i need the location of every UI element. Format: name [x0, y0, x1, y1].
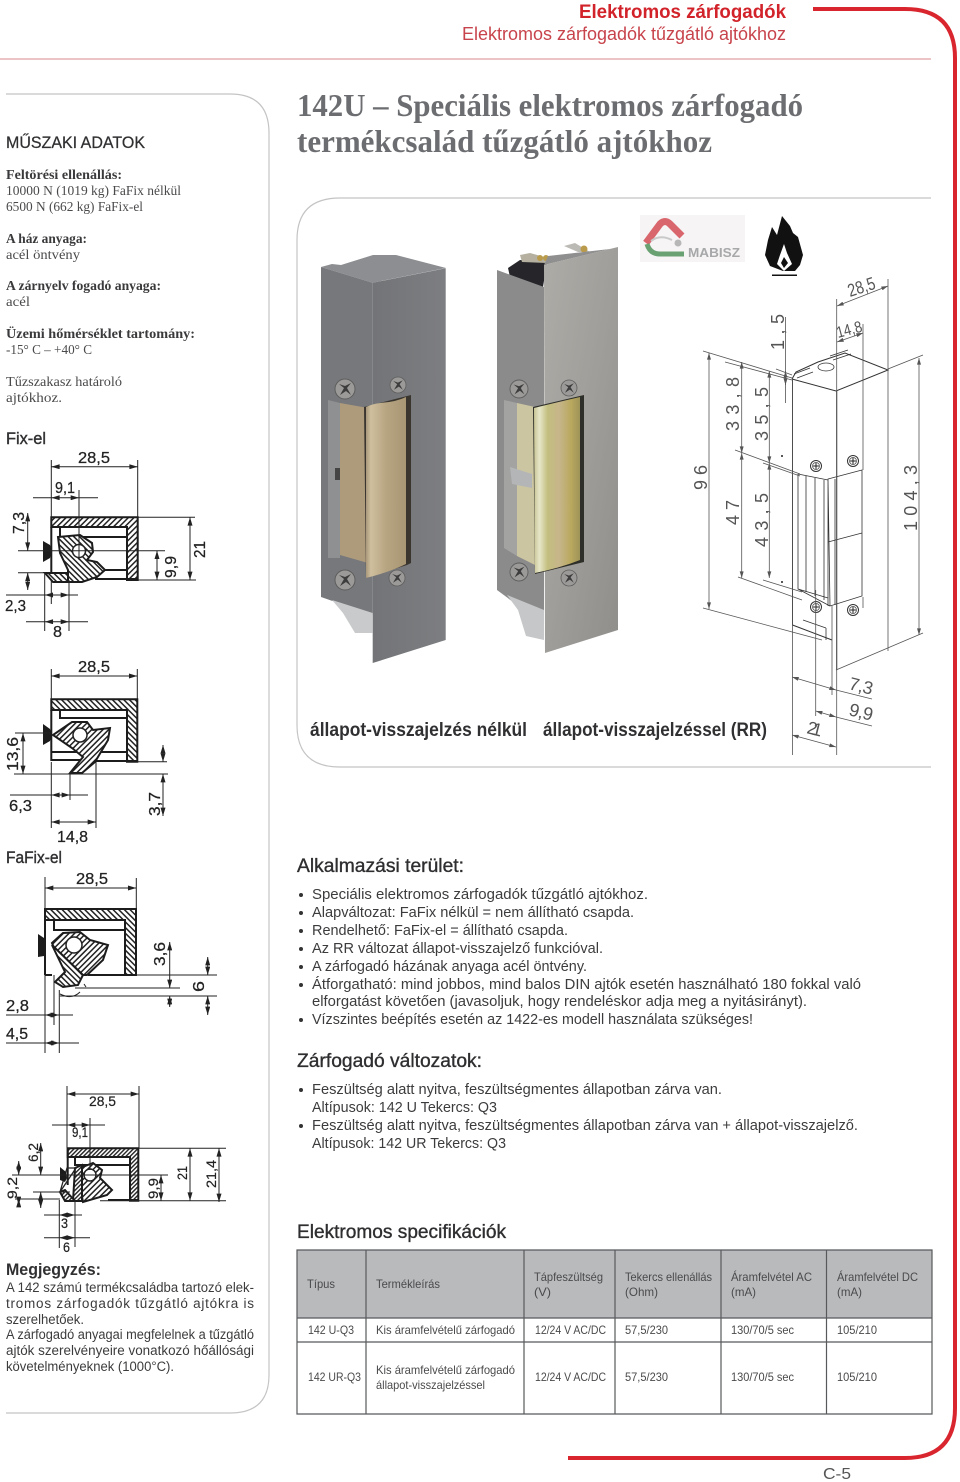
- table: electrical specifications: Áramfelvétel DC: [837, 1269, 918, 1284]
- section: application area: [297, 856, 861, 1028]
- logo: MABISZ: MABISZ: [688, 245, 740, 260]
- note text: tromos zárfogadók tűzgátló ajtókra is: [6, 1296, 254, 1311]
- table: electrical specifications: (mA): [837, 1285, 862, 1299]
- red page frame: [568, 9, 955, 1458]
- table: electrical specifications: Tápfeszültség: [534, 1270, 603, 1284]
- technical drawing: isometric strike with dimensions: 104,3: [901, 465, 921, 531]
- table: electrical specifications: 105/210: [837, 1323, 877, 1337]
- table: electrical specifications: 142 UR-Q3: [308, 1370, 361, 1384]
- note text: szerelhetőek.: [6, 1312, 84, 1327]
- table: electrical specifications: 130/70/5 sec: [731, 1370, 794, 1384]
- drawing: Fix-el open section: 6,3: [9, 798, 32, 815]
- technical drawing: isometric strike with dimensions: 1,5: [768, 314, 788, 350]
- table: electrical specifications: (mA): [731, 1285, 756, 1299]
- drawing: FaFix-el section: [6, 871, 217, 1053]
- header: Elektromos zárfogadók: [579, 2, 786, 23]
- table: electrical specifications: (Ohm): [625, 1285, 658, 1299]
- technical drawing: isometric strike with dimensions: 96: [691, 465, 711, 490]
- captions under product photos: állapot-visszajelzés nélkül: [310, 720, 527, 741]
- panel: technical data: [6, 133, 195, 405]
- drawing: Fix-el closed section: 8: [53, 624, 62, 641]
- bullet list: strike variants: Feszültség alatt nyitva, feszültségmentes állapotban zárva van + állapot-visszajelző.: [312, 1117, 858, 1134]
- technical drawing: isometric strike with dimensions: 14,8: [835, 319, 864, 342]
- drawing: FaFix-el section: 6: [191, 981, 208, 992]
- drawing: lower section with dimensions: 6: [63, 1239, 70, 1255]
- table: electrical specifications: 130/70/5 sec: [731, 1323, 794, 1337]
- text block: specs: Tűzszakasz határoló: [6, 374, 122, 389]
- note text: ajtók szerelvényeire vonatkozó hőállósági: [6, 1343, 254, 1358]
- table: electrical specifications: (V): [534, 1285, 551, 1299]
- drawing: lower section with dimensions: 21,4: [203, 1160, 219, 1188]
- drawing: Fix-el open section: 28,5: [78, 659, 110, 676]
- bullet list: application area: Alapváltozat: FaFix nélkül = nem állítható csapda.: [312, 904, 634, 921]
- bullet list: application area: A zárfogadó házának anyaga acél öntvény.: [312, 958, 587, 975]
- technical drawing: isometric strike with dimensions: 7,3: [847, 673, 875, 699]
- table: electrical specifications: Áramfelvétel AC: [731, 1269, 812, 1284]
- table: electrical specifications: 57,5/230: [625, 1370, 668, 1384]
- drawing: FaFix-el section: 4,5: [6, 1026, 28, 1043]
- drawing: Fix-el open section: 13,6: [5, 737, 22, 771]
- table: electrical specifications: 105/210: [837, 1370, 877, 1384]
- logo: MABISZ: [640, 215, 745, 262]
- table: electrical specifications: 12/24 V AC/DC: [535, 1370, 606, 1384]
- table: electrical specifications: [297, 1250, 932, 1414]
- heading: FaFix-el: FaFix-el: [6, 848, 62, 867]
- technical drawing: isometric strike with dimensions: 9,9: [847, 699, 875, 725]
- main title: 142U – Speciális elektromos zárfogadó: [297, 87, 803, 123]
- heading: technical data: MŰSZAKI ADATOK: [6, 133, 146, 152]
- note text: Megjegyzés:: [6, 1260, 101, 1279]
- drawing: lower section with dimensions: 9,2: [4, 1177, 20, 1199]
- bullet list: application area: Az RR változat állapot-visszajelző funkcióval.: [312, 940, 603, 957]
- text block: specs: Üzemi hőmérséklet tartomány:: [6, 326, 195, 341]
- captions under product photos: [310, 720, 767, 741]
- technical drawing: isometric strike with dimensions: 35,5: [752, 387, 772, 441]
- text block: specs: acél: [6, 294, 30, 309]
- drawing: FaFix-el section: 2,8: [6, 998, 29, 1015]
- bullet list: strike variants: Altípusok: 142 UR Tekercs: Q3: [312, 1135, 506, 1152]
- note text: követelményeknek (1000°C).: [6, 1359, 174, 1374]
- bullet list: application area: elforgatást követően (javasoljuk, hogy rendeléskor adja meg a nyitásirányt).: [312, 993, 807, 1010]
- drawing: lower section with dimensions: 28,5: [89, 1093, 116, 1109]
- text block: specs: acél öntvény: [6, 247, 80, 262]
- drawing: Fix-el closed section: 21: [192, 541, 209, 558]
- bullet list: application area: Speciális elektromos zárfogadók tűzgátló ajtókhoz.: [312, 886, 648, 903]
- text block: specs: -15° C – +40° C: [6, 342, 92, 357]
- table: electrical specifications: Tekercs ellenállás: [625, 1270, 712, 1284]
- drawing: Fix-el open section: [5, 659, 168, 846]
- table: electrical specifications: Termékleírás: [376, 1277, 440, 1291]
- section: strike variants: [297, 1051, 858, 1152]
- table: electrical specifications: Típus: [307, 1277, 335, 1291]
- text block: specs: ajtókhoz.: [6, 390, 62, 405]
- text block: specs: 6500 N (662 kg) FaFix-el: [6, 199, 143, 214]
- heading: strike variants: Zárfogadó változatok:: [297, 1051, 482, 1072]
- bullet list: strike variants: [299, 1081, 858, 1152]
- icon: flame: [765, 216, 803, 276]
- drawing: Fix-el closed section: 9,9: [163, 556, 180, 578]
- table: electrical specifications: 12/24 V AC/DC: [535, 1323, 606, 1337]
- product photo: strike without feedback: [321, 255, 446, 663]
- header: Elektromos zárfogadók tűzgátló ajtókhoz: [462, 23, 786, 44]
- drawing: Fix-el open section: 3,7: [147, 792, 164, 816]
- drawing: Fix-el closed section: [5, 450, 209, 641]
- panel: product outline: [297, 198, 931, 767]
- drawing: FaFix-el section: 3,6: [152, 942, 169, 966]
- drawing: lower section with dimensions: 9,1: [72, 1124, 88, 1140]
- panel: left column outline: [6, 94, 269, 1413]
- technical drawing: isometric strike with dimensions: 47: [723, 500, 743, 525]
- technical drawing: isometric strike with dimensions: 21: [805, 717, 824, 741]
- table: electrical specifications: Kis áramfelvételű zárfogadó: [376, 1363, 515, 1377]
- bullet list: strike variants: Feszültség alatt nyitva, feszültségmentes állapotban zárva van.: [312, 1081, 722, 1098]
- bullet list: strike variants: Altípusok: 142 U Tekercs: Q3: [312, 1099, 497, 1116]
- technical drawing: isometric strike with dimensions: 28,5: [845, 273, 878, 301]
- text block: specs: Feltörési ellenállás:: [6, 167, 122, 182]
- drawing: Fix-el closed section: 9,1: [55, 480, 75, 497]
- bullet list: application area: Átforgatható: mind jobbos, mind balos DIN ajtók esetén használható 180 fokkal való: [312, 976, 861, 993]
- main title: [297, 87, 803, 159]
- drawing: lower section with dimensions: [4, 1086, 226, 1255]
- technical drawing: isometric strike with dimensions: 43,5: [752, 493, 772, 547]
- drawing: lower section with dimensions: 6,2: [25, 1143, 41, 1162]
- table: electrical specifications: Kis áramfelvételű zárfogadó: [376, 1323, 515, 1337]
- main title: termékcsalád tűzgátló ajtókhoz: [297, 123, 712, 159]
- heading: electrical specifications: Elektromos specifikációk: [297, 1222, 506, 1243]
- drawing: lower section with dimensions: 9,9: [145, 1178, 161, 1199]
- drawing: Fix-el closed section: 7,3: [11, 512, 28, 534]
- drawing: Fix-el closed section: 2,3: [5, 598, 26, 615]
- table: electrical specifications: 57,5/230: [625, 1323, 668, 1337]
- drawing: lower section with dimensions: 3: [61, 1215, 68, 1231]
- heading: Fix-el: Fix-el: [6, 429, 46, 448]
- note text: [6, 1260, 254, 1374]
- drawing: Fix-el open section: 14,8: [57, 829, 88, 846]
- heading: application area: Alkalmazási terület:: [297, 856, 464, 877]
- drawing: FaFix-el section: 28,5: [76, 871, 108, 888]
- drawing: Fix-el closed section: 28,5: [78, 450, 110, 467]
- bullet list: application area: Rendelhető: FaFix-el = állítható csapda.: [312, 922, 568, 939]
- table: electrical specifications: állapot-visszajelzéssel: [376, 1378, 485, 1392]
- text block: specs: 10000 N (1019 kg) FaFix nélkül: [6, 183, 181, 198]
- text block: specs: A zárnyelv fogadó anyaga:: [6, 278, 161, 293]
- note text: A zárfogadó anyagai megfelelnek a tűzgátló: [6, 1327, 254, 1342]
- product photo: strike with feedback (RR): [497, 243, 618, 653]
- table: electrical specifications: 142 U-Q3: [308, 1323, 354, 1337]
- note text: A 142 számú termékcsaládba tartozó elek-: [6, 1280, 254, 1295]
- header: [0, 2, 931, 59]
- bullet list: application area: Vízszintes beépítés esetén az 1422-es modell használata szükséges!: [312, 1011, 753, 1028]
- text block: specs: [6, 167, 195, 405]
- technical drawing: isometric strike with dimensions: [691, 273, 923, 755]
- drawing: lower section with dimensions: 21: [174, 1166, 190, 1180]
- captions under product photos: állapot-visszajelzéssel (RR): [543, 720, 767, 741]
- text block: specs: A ház anyaga:: [6, 231, 87, 246]
- bullet list: application area: [299, 886, 861, 1028]
- technical drawing: isometric strike with dimensions: 33,8: [723, 377, 743, 431]
